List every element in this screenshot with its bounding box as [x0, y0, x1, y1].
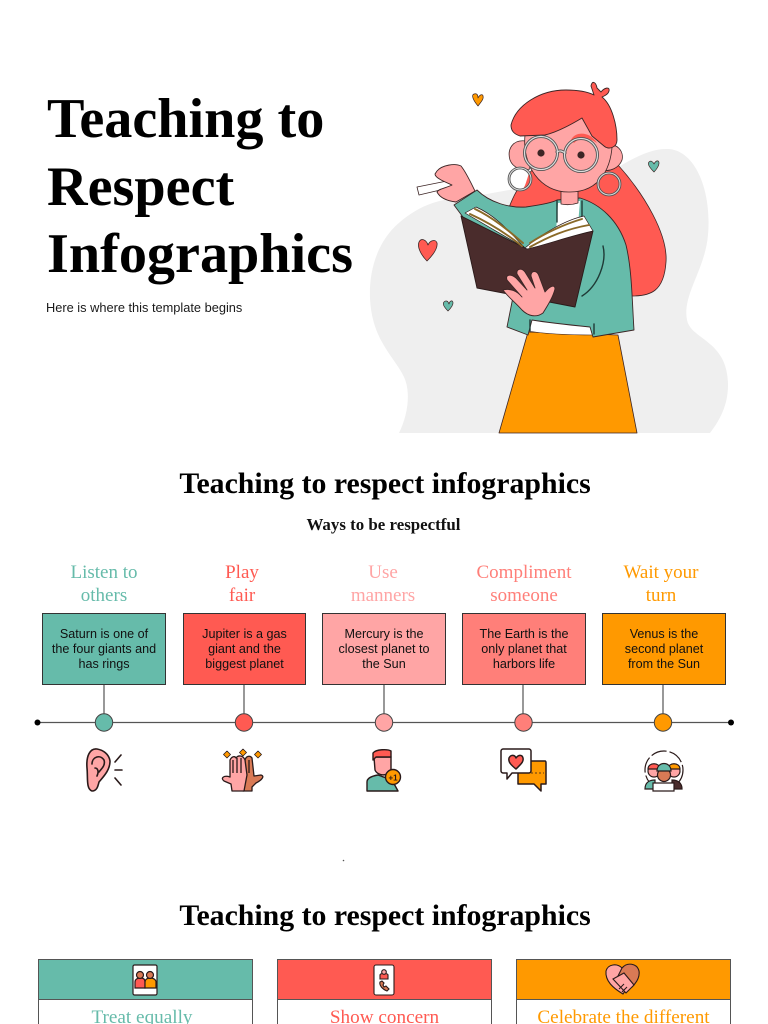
section subheading: Ways to be respectful	[306, 515, 461, 534]
step box: Earth: The Earth is the	[480, 627, 568, 641]
icon: ear	[87, 749, 122, 791]
heart red	[418, 240, 437, 261]
step box: Venus	[602, 613, 726, 685]
heart teal right	[648, 161, 659, 172]
skirt	[499, 332, 637, 433]
step box: Mercury: the Sun	[362, 657, 406, 671]
earrings	[509, 168, 620, 195]
panel heading	[516, 999, 731, 1024]
step box: Jupiter	[183, 613, 306, 685]
timeline markers	[95, 714, 672, 731]
step box: Jupiter: Jupiter is a gas	[202, 627, 287, 641]
step box: Venus: Venus is the	[630, 627, 698, 641]
illustration: teacher with book	[370, 82, 728, 434]
step box: Earth: harbors life	[493, 657, 555, 671]
step label: listen: others	[81, 585, 127, 606]
step box: Earth: only planet that	[481, 642, 567, 656]
step box: Earth	[462, 613, 586, 685]
timeline axis	[37, 685, 731, 722]
icon: framed friends	[133, 965, 157, 995]
panel heading	[277, 999, 492, 1024]
step label: compliment: Compliment	[476, 562, 572, 583]
step label: compliment	[476, 562, 572, 606]
icon: person plus one: +1	[388, 774, 398, 782]
subtitle: Here is where this template begins	[46, 300, 242, 315]
panel: treat equally	[38, 959, 253, 1024]
step label: listen: Listen to	[70, 562, 138, 583]
panel header	[38, 959, 253, 1000]
panel heading	[38, 999, 253, 1024]
eyebrow	[571, 134, 597, 143]
step box: Venus: from the Sun	[628, 657, 700, 671]
panel header	[516, 959, 731, 1000]
ears	[509, 141, 622, 171]
step label: manners: Use	[368, 562, 398, 583]
panel: celebrate the different	[516, 959, 731, 1024]
step label: wait	[624, 562, 698, 606]
background blob	[370, 149, 728, 433]
timeline end dots	[34, 720, 734, 726]
raised hand	[435, 165, 475, 202]
neck	[561, 188, 578, 205]
shirt	[525, 315, 595, 335]
icon: high five	[222, 749, 263, 791]
glasses	[524, 136, 598, 172]
icon: phone call	[374, 965, 394, 995]
shirt collar	[556, 201, 580, 232]
page lines	[470, 209, 589, 247]
step label: wait: Wait your	[624, 562, 698, 583]
step label: wait: turn	[646, 585, 676, 606]
title: Teaching to Respect Infographics	[47, 88, 353, 285]
step box: Saturn: has rings	[78, 657, 130, 671]
icon: person plus one	[367, 750, 400, 791]
step box: Jupiter: biggest planet	[205, 657, 284, 671]
jacket	[454, 190, 634, 337]
step label: compliment: someone	[490, 585, 558, 606]
step box: Saturn: Saturn is one of	[60, 627, 148, 641]
step label: play fair: Play	[225, 562, 259, 583]
step label: manners: manners	[351, 585, 415, 606]
section heading: cards: Teaching to respect infographics	[179, 899, 591, 932]
step box: Mercury	[322, 613, 446, 685]
panel header	[277, 959, 492, 1000]
book cover	[461, 216, 593, 307]
panel: show concern	[277, 959, 492, 1024]
left earring fill	[509, 168, 529, 190]
step box: Saturn: the four giants and	[52, 642, 156, 656]
icon: diverse group	[645, 751, 683, 791]
step label: play fair	[225, 562, 259, 606]
hair back	[508, 165, 666, 330]
step box: Mercury: closest planet to	[338, 642, 430, 656]
stray dot	[343, 860, 344, 861]
step label: listen	[70, 562, 138, 606]
step label: manners	[351, 562, 415, 606]
eyes	[537, 149, 585, 159]
heart teal left	[443, 301, 453, 311]
icon: chat bubbles	[501, 749, 546, 791]
section heading: timeline: Teaching to respect infographics	[179, 467, 591, 500]
heart orange	[473, 94, 483, 106]
step label: play fair: fair	[229, 585, 255, 606]
step box: Saturn	[42, 613, 166, 685]
hand on book	[503, 269, 555, 316]
step box: Venus: second planet	[625, 642, 703, 656]
jacket stitches	[530, 201, 604, 334]
step box: Mercury: Mercury is the	[344, 627, 424, 641]
face	[525, 112, 612, 192]
book pages	[465, 207, 593, 249]
chalk	[417, 180, 453, 195]
step box: Jupiter: giant and the	[208, 642, 281, 656]
icon: heart handshake	[606, 964, 639, 994]
hair top	[511, 82, 617, 148]
